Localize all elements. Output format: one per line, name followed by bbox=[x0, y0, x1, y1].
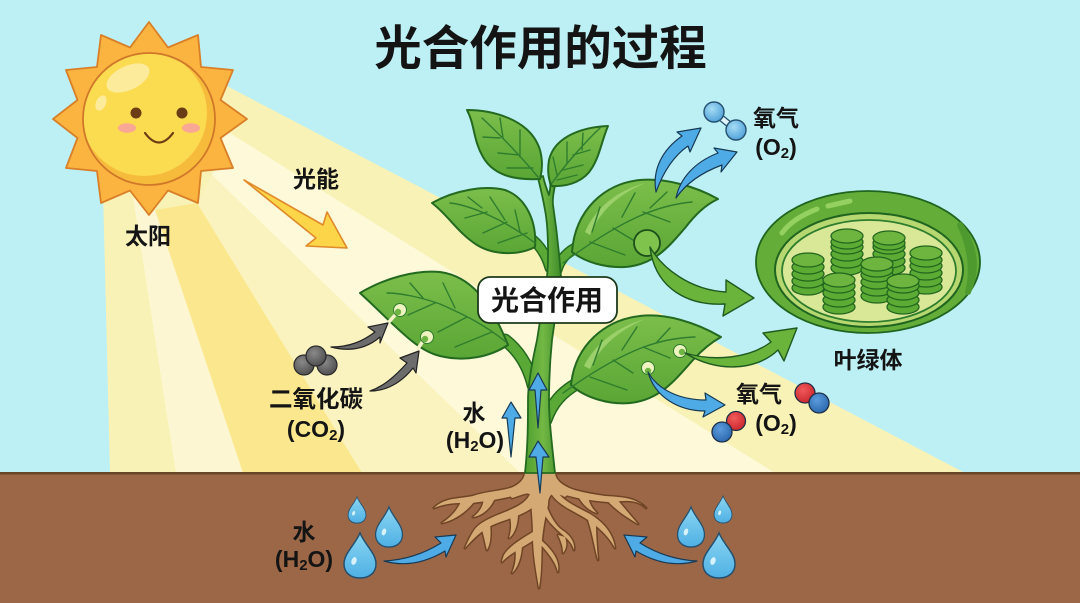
thylakoid stack B bbox=[831, 229, 863, 275]
label: 二氧化碳 (CO2): ) bbox=[337, 416, 345, 442]
arrow: water in stem lower bbox=[529, 441, 549, 493]
leaf: lower right bbox=[563, 315, 721, 403]
label: 二氧化碳 (CO2): 2 bbox=[329, 427, 337, 444]
water drops right bbox=[678, 496, 735, 578]
label: 氧气 (O2) lower: 氧气 bbox=[736, 381, 782, 407]
leaf: top right bbox=[548, 126, 608, 186]
oxygen molecule: lower right bbox=[795, 383, 829, 413]
label: 水 (H2O) soil: 2 bbox=[299, 557, 308, 574]
leaf: lower left bbox=[360, 272, 508, 359]
stomata on leaves bbox=[388, 304, 686, 374]
label: 氧气 (O2) top: ) bbox=[789, 134, 797, 160]
arrow: CO2 into leaf upper bbox=[331, 323, 388, 349]
label: 水 (H2O) soil: (H bbox=[275, 546, 299, 572]
arrow: oxygen release 1 bbox=[655, 128, 701, 192]
label: 二氧化碳 (CO2) bbox=[269, 386, 363, 444]
oxygen molecule: top bbox=[704, 102, 746, 140]
title: 光合作用的过程 bbox=[374, 23, 707, 76]
label: 氧气 (O2) lower: ) bbox=[789, 410, 797, 436]
arrow: water rising beside stem bbox=[502, 402, 521, 457]
label: 光能: 光能 bbox=[293, 166, 339, 192]
thylakoid stack F bbox=[823, 273, 855, 314]
sun bbox=[53, 22, 247, 215]
label: 氧气 (O2) top bbox=[753, 105, 799, 162]
label: 水 (H2O) soil: 水 bbox=[292, 519, 316, 545]
label: 水 (H2O) middle: (H bbox=[446, 427, 470, 453]
plant stem and branches bbox=[505, 176, 578, 473]
arrow: water in stem upper bbox=[529, 373, 547, 428]
label: 氧气 (O2) top: (O bbox=[755, 134, 781, 160]
arrow: light energy bbox=[244, 180, 347, 248]
thylakoid stack E bbox=[861, 257, 893, 303]
soil ground bbox=[0, 472, 1080, 603]
label: 氧气 (O2) lower: (O bbox=[755, 410, 781, 436]
water drops left bbox=[344, 497, 402, 578]
leaf: middle left bbox=[432, 188, 535, 253]
label: 氧气 (O2) top: 2 bbox=[781, 145, 789, 162]
plant roots bbox=[434, 473, 646, 588]
leaf: middle right bbox=[563, 180, 718, 267]
label: 水 (H2O) soil: O) bbox=[308, 546, 333, 572]
label: 氧气 (O2) lower: 2 bbox=[781, 421, 789, 438]
arrow: leaf to chloroplast upper bbox=[650, 247, 754, 316]
oxygen molecule: lower left bbox=[712, 412, 746, 442]
label: 太阳: 太阳 bbox=[125, 223, 171, 249]
thylakoid stack C bbox=[873, 231, 905, 275]
光合作用 label: 光合作用 bbox=[491, 285, 603, 316]
thylakoid stack A bbox=[792, 253, 824, 295]
arrow: oxygen from lower leaf bbox=[648, 372, 725, 417]
label: 氧气 (O2) lower bbox=[736, 381, 797, 438]
arrow: leaf to chloroplast lower bbox=[685, 328, 797, 367]
highlight circle on leaf bbox=[634, 230, 660, 256]
carbon dioxide molecule bbox=[294, 346, 337, 375]
sunlight beams bbox=[103, 85, 965, 473]
label: 水 (H2O) middle: O) bbox=[479, 427, 504, 453]
arrow: CO2 into leaf lower bbox=[370, 351, 419, 391]
label: 二氧化碳 (CO2): (CO bbox=[287, 416, 329, 442]
label: 水 (H2O) soil bbox=[275, 519, 333, 574]
光合作用 label bbox=[478, 277, 617, 323]
label: 水 (H2O) middle bbox=[446, 400, 504, 455]
label: 二氧化碳 (CO2): 二氧化碳 bbox=[269, 386, 363, 412]
label: 叶绿体: 叶绿体 bbox=[834, 347, 902, 373]
arrow: water to roots right bbox=[624, 535, 697, 564]
arrow: water to roots left bbox=[384, 535, 456, 564]
chloroplast bbox=[756, 191, 980, 333]
arrow: oxygen release 2 bbox=[676, 148, 737, 198]
label: 水 (H2O) middle: 2 bbox=[470, 438, 479, 455]
label: 氧气 (O2) top: 氧气 bbox=[753, 105, 799, 131]
label: 水 (H2O) middle: 水 bbox=[462, 400, 486, 426]
thylakoid stack G bbox=[887, 274, 919, 314]
leaf: top left bbox=[467, 110, 542, 179]
thylakoid stack D bbox=[910, 246, 942, 294]
